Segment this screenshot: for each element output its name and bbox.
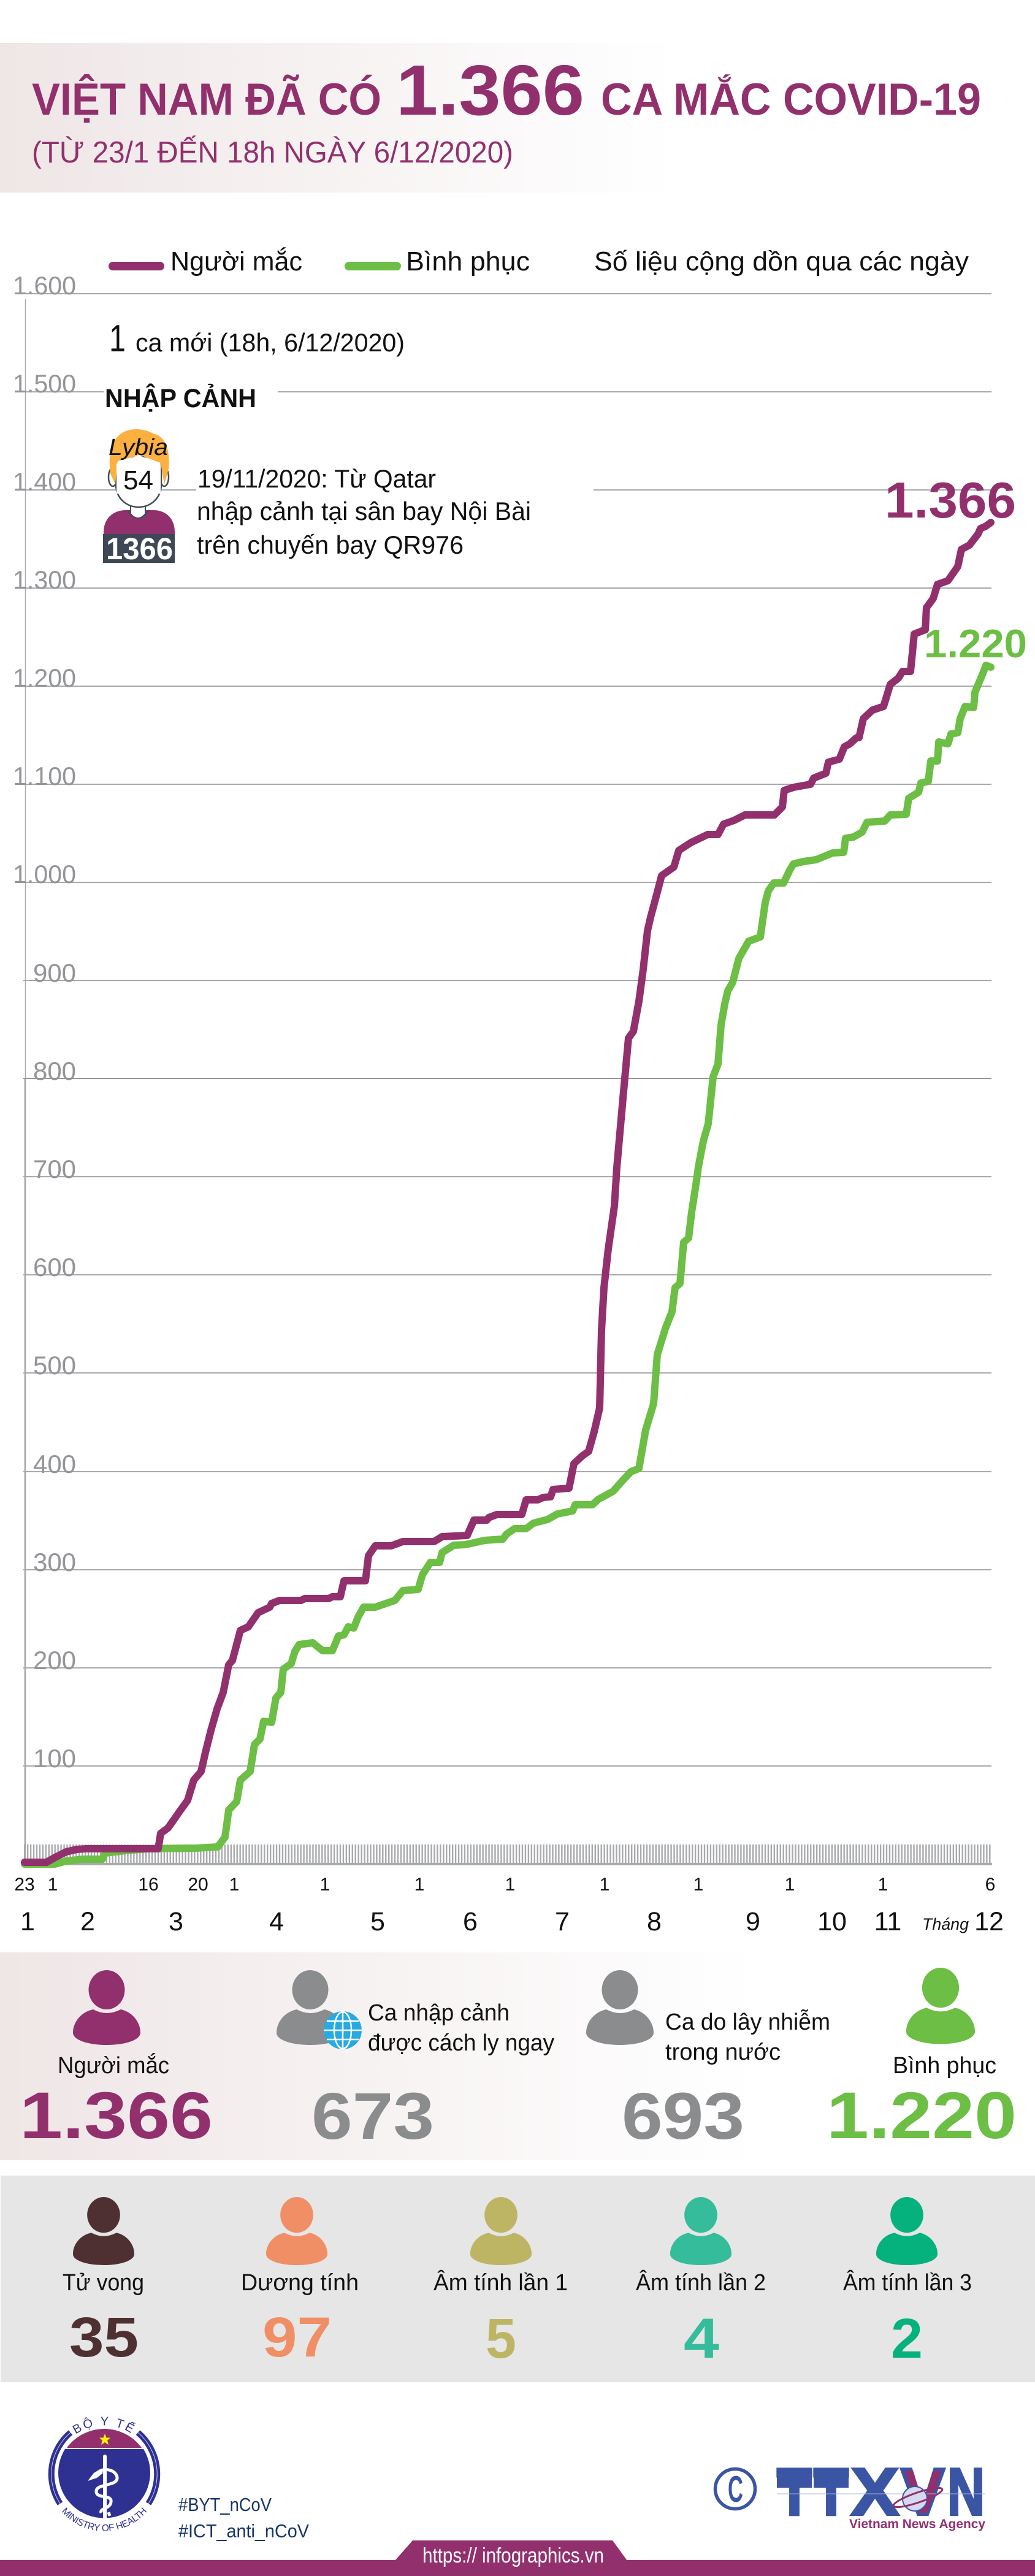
stat numbers: 693 <box>622 2079 744 2153</box>
stat numbers: 1.366 <box>20 2078 213 2152</box>
logo: TTXVN: X <box>851 2455 899 2529</box>
icon: negative twice person <box>670 2197 731 2265</box>
icon: positive person <box>266 2197 327 2265</box>
y axis labels: 100 <box>33 1744 76 1773</box>
month labels: 10 <box>817 1907 847 1936</box>
day tick labels: 1 <box>320 1875 330 1895</box>
patient description <box>197 464 531 559</box>
outcome labels: Tử vong <box>63 2270 144 2296</box>
month labels: 1 <box>20 1907 35 1936</box>
y axis labels: 800 <box>33 1057 76 1085</box>
outcome labels: Âm tính lần 3 <box>843 2269 972 2296</box>
outcome numbers: 2 <box>891 2307 923 2370</box>
stat labels: trong nước <box>665 2039 781 2065</box>
header band <box>0 43 981 193</box>
stat numbers: 673 <box>311 2079 434 2153</box>
y axis labels: 700 <box>33 1155 76 1183</box>
day tick labels: 1 <box>878 1875 888 1895</box>
legend: Bình phục <box>406 247 530 277</box>
y axis labels: 1.100 <box>13 762 76 790</box>
end value: cases: 1.366 <box>885 472 1016 529</box>
month labels: 5 <box>370 1907 385 1936</box>
outcome numbers: 35 <box>69 2306 139 2369</box>
y axis labels: 500 <box>33 1351 76 1380</box>
y axis labels: 1.500 <box>13 369 76 398</box>
legend <box>113 247 969 277</box>
outcome numbers: 97 <box>262 2306 332 2369</box>
day tick labels: 1 <box>229 1875 239 1895</box>
logo: TTXVN <box>777 2455 985 2531</box>
stat labels: được cách ly ngay <box>368 2030 554 2056</box>
month labels: 6 <box>463 1907 478 1936</box>
recovered line <box>25 665 991 1864</box>
copyright symbol: C <box>728 2469 743 2510</box>
cases line <box>25 522 991 1862</box>
y axis labels: 400 <box>33 1450 76 1478</box>
footer bar: https:// infographics.vn <box>422 2544 604 2567</box>
icon: domestic person <box>586 1970 654 2045</box>
day tick labels: 1 <box>414 1875 424 1895</box>
month labels <box>20 1907 1004 1936</box>
month labels: 12 <box>974 1907 1004 1936</box>
outcome labels: Âm tính lần 1 <box>433 2269 568 2296</box>
y axis labels: 1.200 <box>13 663 76 692</box>
outcome numbers: 5 <box>486 2307 516 2370</box>
stat labels: Ca do lây nhiễm <box>665 2009 830 2035</box>
day tick labels: 6 <box>985 1875 995 1895</box>
day tick labels: 1 <box>693 1875 703 1895</box>
stat labels: Người mắc <box>58 2052 169 2079</box>
icon: negative once person <box>470 2197 532 2265</box>
end value: recovered: 1.220 <box>924 621 1027 666</box>
logo: TTXVN: N <box>947 2455 985 2529</box>
y axis labels: 900 <box>33 958 76 987</box>
y axis labels: 1.000 <box>13 860 76 889</box>
y axis labels: 1.300 <box>13 565 76 594</box>
patient icon <box>103 429 175 566</box>
day tick labels: 20 <box>188 1875 208 1895</box>
month axis caption: Tháng <box>922 1915 969 1933</box>
y axis labels: 200 <box>33 1646 76 1675</box>
month labels: 11 <box>874 1907 901 1936</box>
month labels: 3 <box>169 1907 183 1936</box>
hashtags: #BYT_nCoV <box>178 2494 272 2515</box>
logo: TTXVN: T <box>814 2455 849 2529</box>
y axis labels: 600 <box>33 1253 76 1282</box>
title <box>32 50 981 130</box>
new case note <box>109 318 405 360</box>
patient icon: 54 <box>123 465 153 495</box>
outcome labels: Âm tính lần 2 <box>636 2269 766 2296</box>
patient description: nhập cảnh tại sân bay Nội Bài <box>197 497 531 526</box>
footer bar <box>0 2540 1035 2576</box>
y axis labels <box>13 271 76 1773</box>
stat numbers <box>20 2078 1017 2153</box>
logo: ministry of health <box>48 2417 161 2531</box>
month labels: 8 <box>647 1907 662 1936</box>
icon: deaths person <box>73 2197 134 2265</box>
patient icon: Lybia <box>109 435 168 461</box>
new case note: 1 <box>109 318 126 360</box>
y axis labels: 1.600 <box>13 271 76 300</box>
title: 1.366 <box>396 50 584 130</box>
outcome labels <box>63 2269 972 2296</box>
day tick labels: 1 <box>48 1875 58 1895</box>
stat labels <box>58 2000 996 2079</box>
panel: totals <box>0 1952 1017 2160</box>
legend: Số liệu cộng dồn qua các ngày <box>594 247 969 277</box>
new case note: ca mới (18h, 6/12/2020) <box>136 328 405 357</box>
day tick labels: 23 <box>14 1875 35 1895</box>
daily tick band <box>24 1844 992 1864</box>
title: VIỆT NAM ĐÃ CÓ <box>32 75 381 124</box>
logo: ministry of health: MINISTRY OF HEALTH <box>62 2507 147 2531</box>
icon: recovered person <box>906 1968 975 2044</box>
month labels: 9 <box>746 1907 760 1936</box>
section heading: imported: NHẬP CẢNH <box>105 383 256 413</box>
title: CA MẮC COVID-19 <box>601 75 981 124</box>
icon: negative thrice person <box>876 2197 938 2265</box>
day tick labels <box>14 1875 995 1895</box>
outcome numbers <box>69 2306 923 2370</box>
logo: TTXVN: Vietnam News Agency <box>849 2517 985 2531</box>
logo: ministry of health: BỘ Y TẾ <box>72 2417 136 2434</box>
subtitle: (TỪ 23/1 ĐẾN 18h NGÀY 6/12/2020) <box>32 136 513 169</box>
patient description: trên chuyến bay QR976 <box>197 530 464 559</box>
day tick labels: 16 <box>138 1875 159 1895</box>
logo: TTXVN: V <box>904 2458 942 2526</box>
logo: TTXVN: T <box>777 2455 812 2529</box>
day tick labels: 1 <box>600 1875 609 1895</box>
icon: imported person <box>277 1970 344 2045</box>
stat labels: Ca nhập cảnh <box>368 2000 510 2026</box>
line chart <box>13 271 1027 1936</box>
month labels: 7 <box>555 1907 570 1936</box>
outcome numbers: 4 <box>684 2307 719 2370</box>
copyright symbol <box>715 2469 755 2510</box>
logo: TTXVN: V <box>901 2455 945 2529</box>
y axis labels: 300 <box>33 1548 76 1577</box>
stat numbers: 1.220 <box>827 2078 1017 2152</box>
hashtags: #ICT_anti_nCoV <box>178 2520 309 2542</box>
legend: Người mắc <box>170 247 302 277</box>
month labels: 2 <box>80 1907 95 1936</box>
y axis labels: 1.400 <box>13 467 76 496</box>
day tick labels: 1 <box>785 1875 795 1895</box>
icon: globe <box>324 2011 362 2049</box>
stat labels: Bình phục <box>893 2053 996 2079</box>
outcome labels: Dương tính <box>241 2270 359 2296</box>
month labels: 4 <box>269 1907 284 1936</box>
patient icon: 1366 <box>106 532 173 566</box>
icon: cases person <box>73 1970 140 2045</box>
day tick labels: 1 <box>505 1875 515 1895</box>
patient description: 19/11/2020: Từ Qatar <box>197 464 436 493</box>
hashtags <box>178 2494 309 2542</box>
panel: outcomes <box>1 2176 1035 2382</box>
